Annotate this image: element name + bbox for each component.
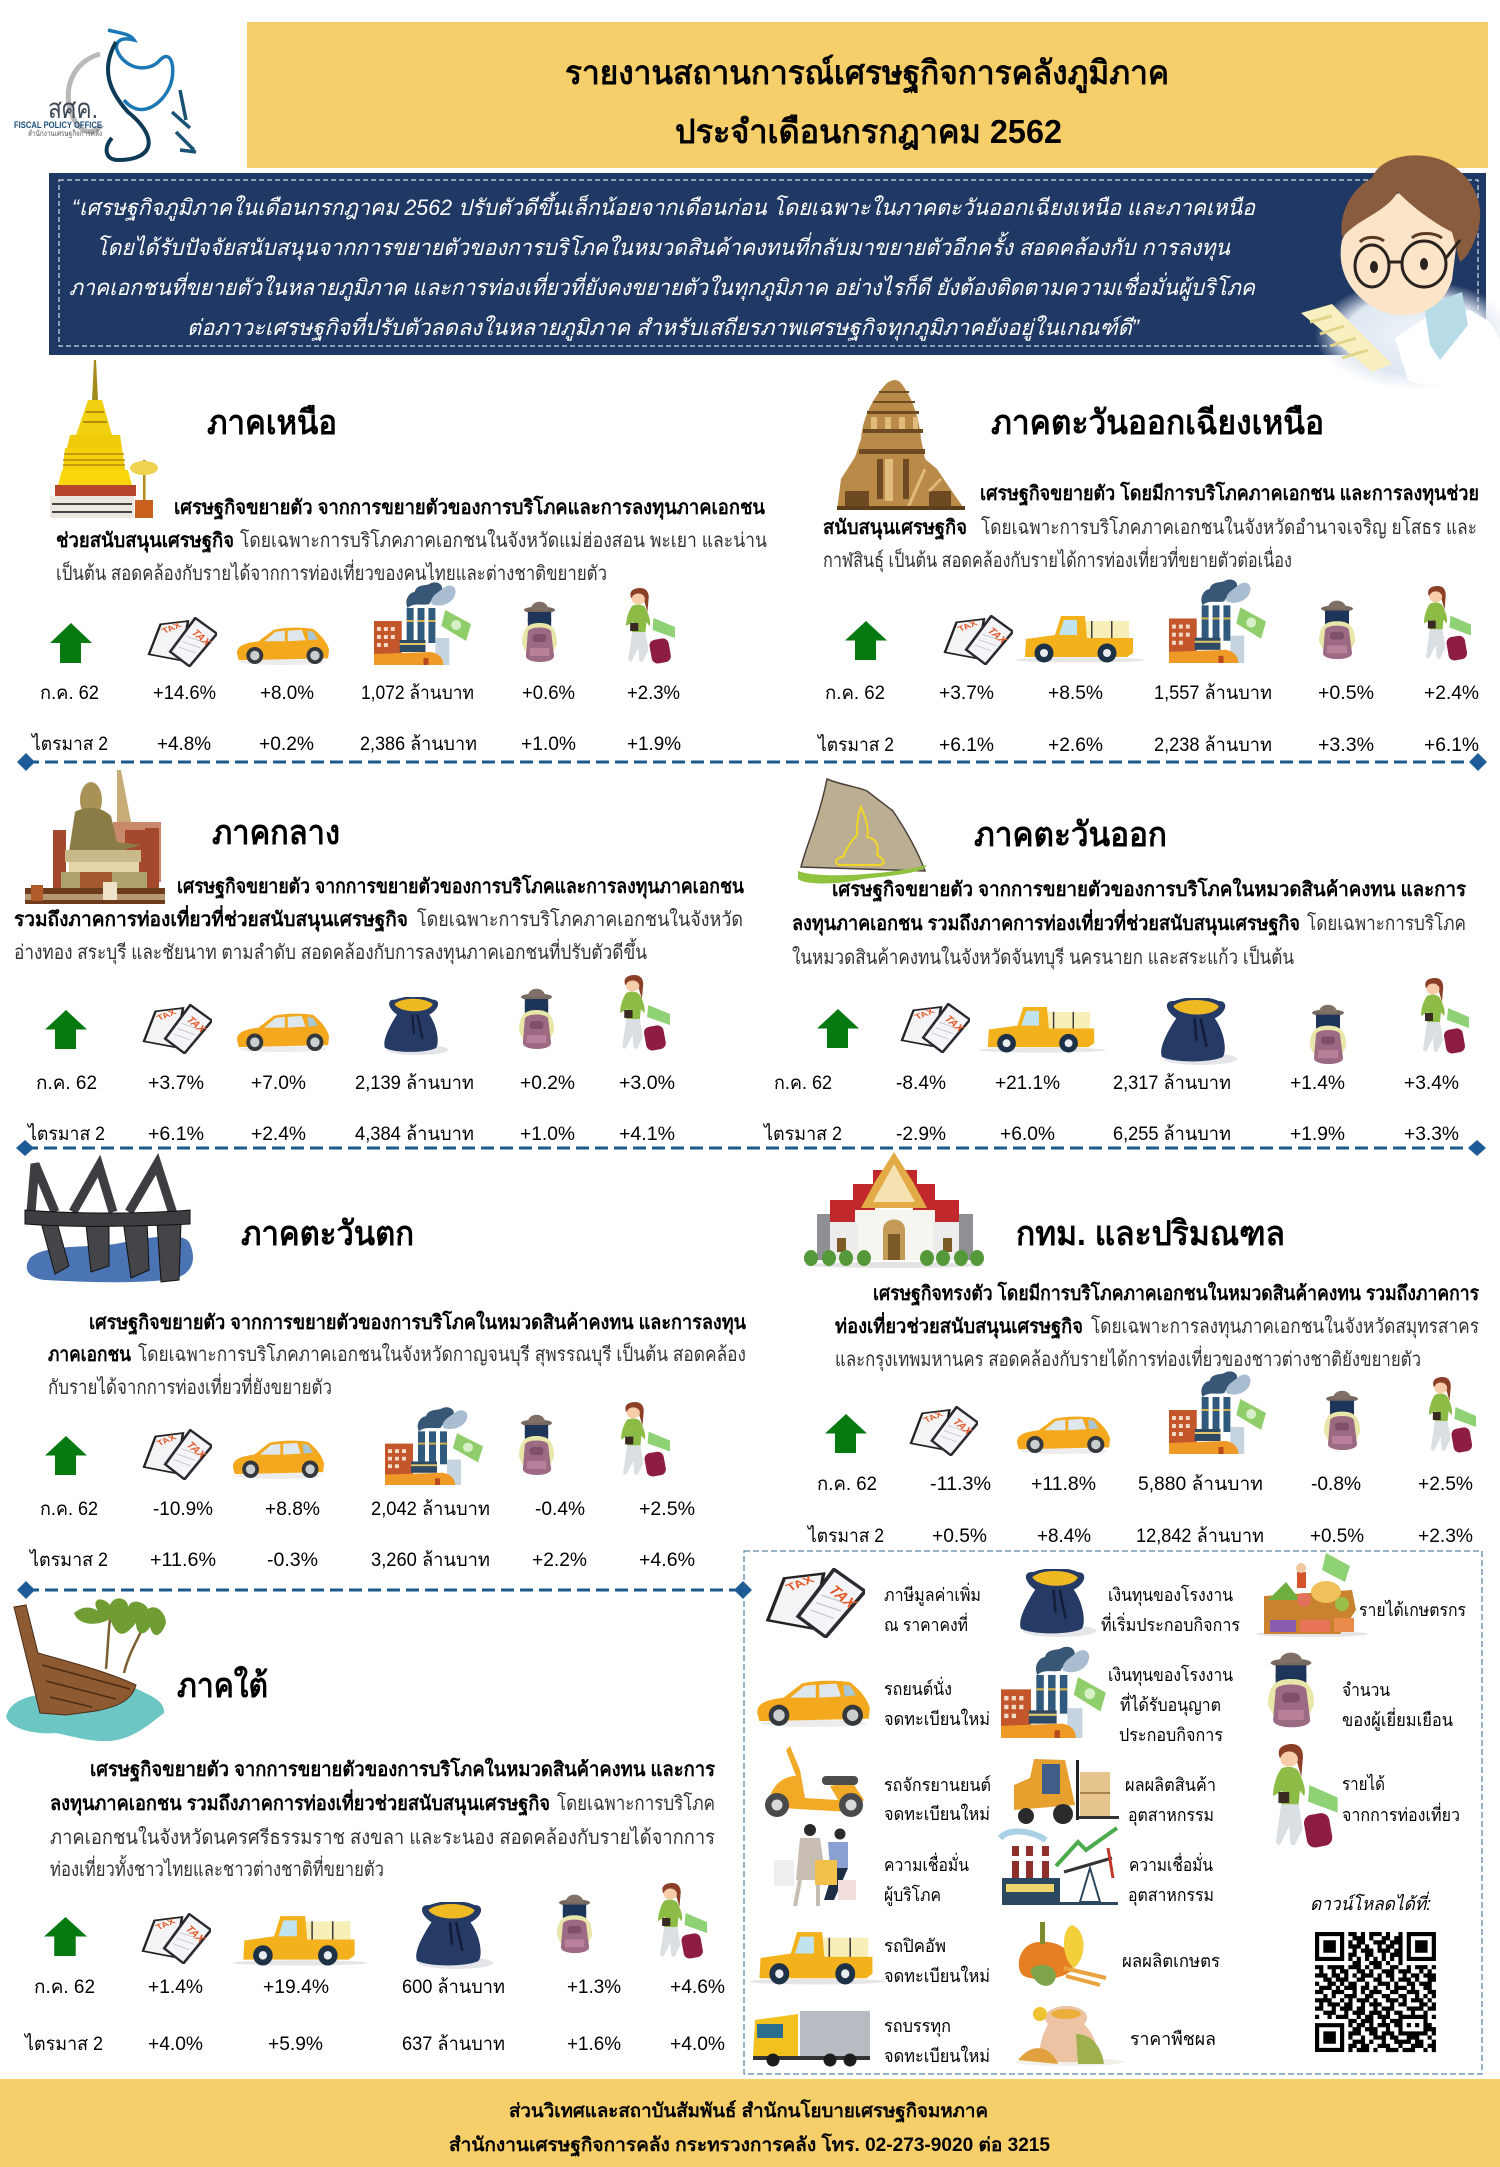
icon row (45, 1402, 670, 1485)
icon: Phimai prasat (837, 380, 965, 510)
paragraph (50, 1757, 715, 1881)
legend: industrial confidence: อุตสาหกรรม (1128, 1885, 1214, 1906)
values: ไตรมาส 2: +2.4% (251, 1124, 306, 1145)
values: ก.ค. 62 (40, 683, 680, 704)
legend: industrial confidence: ความเชื่อมั่น (1129, 1852, 1213, 1875)
values: ไตรมาส 2: +1.0% (520, 1124, 575, 1145)
values: ก.ค. 62: 2,317 ล้านบาท (1113, 1073, 1231, 1094)
values: ไตรมาส 2: +4.0% (670, 2034, 725, 2055)
paragraph (835, 1281, 1479, 1372)
legend: consumer confidence: ความเชื่อมั่น (884, 1852, 969, 1875)
paragraph: โดยเฉพาะการบริโภค (1307, 912, 1466, 935)
summary text: ต่อภาวะเศรษฐกิจที่ปรับตัวลดลงในหลายภูมิภาค สำหรับเสถียรภาพเศรษฐกิจทุกภูมิภาคยังอยู่ในเกณฑ์ดี” (187, 312, 1141, 341)
values: ก.ค. 62: +2.5% (639, 1499, 695, 1520)
values: ไตรมาส 2: +3.3% (1404, 1124, 1459, 1145)
paragraph: เป็นต้น สอดคล้องกับรายได้จากการท่องเที่ยวของคนไทยและต่างชาติขยายตัว (56, 559, 607, 585)
values: ไตรมาส 2: +1.0% (521, 734, 576, 755)
legend: visitors: จำนวน (1342, 1680, 1390, 1700)
legend: new passenger cars: รถยนต์นั่ง (884, 1676, 952, 1699)
paragraph: โดยเฉพาะการบริโภคภาคเอกชนในจังหวัดแม่ฮ่องสอน พะเยา และน่าน (240, 529, 767, 552)
summary text: “เศรษฐกิจภูมิภาคในเดือนกรกฎาคม 2562 ปรับตัวดีขึ้นเล็กน้อยจากเดือนก่อน โดยเฉพาะในภาคตะวันออกเฉียงเหนือ และภาคเหนือ (72, 191, 1256, 221)
values: ไตรมาส 2: +4.6% (639, 1550, 695, 1571)
header banner (247, 22, 1488, 168)
summary text: ภาคเอกชนที่ขยายตัวในหลายภูมิภาค และการท่องเที่ยวที่ยังคงขยายตัวในทุกภูมิภาค อย่างไรก็ดี ยังต้องติดตามความเชื่อมั่นผู้บริโภค (69, 272, 1256, 301)
values: ไตรมาส 2: 4,384 ล้านบาท (355, 1124, 474, 1145)
values: ไตรมาส 2: ไตรมาส 2 (816, 734, 894, 756)
icon: Buddha rock cliff (798, 779, 927, 884)
values: ก.ค. 62: -0.4% (535, 1499, 585, 1520)
footer line 2: สำนักงานเศรษฐกิจการคลัง กระทรวงการคลัง โทร. 02-273-9020 ต่อ 3215 (449, 2133, 1050, 2158)
values: ก.ค. 62: 2,139 ล้านบาท (355, 1073, 474, 1094)
heading: ภาคตะวันตก (241, 1215, 414, 1253)
icon: golden chedi (50, 360, 158, 518)
paragraph: ภาคเอกชน (48, 1344, 131, 1366)
legend: new trucks: รถบรรทุก (884, 2016, 951, 2037)
legend: capital of licensed factories: เงินทุนของโรงงาน (1108, 1664, 1233, 1686)
values: ไตรมาส 2 (816, 734, 1479, 756)
values: ก.ค. 62: +7.0% (251, 1073, 306, 1094)
values: ไตรมาส 2 (762, 1123, 1459, 1145)
values: ก.ค. 62: 1,557 ล้านบาท (1154, 683, 1272, 704)
legend: new motorcycles: รถจักรยานยนต์ (884, 1775, 991, 1795)
values: ไตรมาส 2: +1.6% (567, 2034, 621, 2055)
values: ก.ค. 62: +0.2% (520, 1073, 575, 1094)
legend: capital of licensed factories: ประกอบกิจการ (1119, 1725, 1223, 1745)
values: ก.ค. 62 (40, 1499, 695, 1520)
values: ก.ค. 62: ก.ค. 62 (36, 1073, 97, 1094)
logo: fiscal policy office: สศค. (48, 93, 98, 124)
values: ก.ค. 62: ก.ค. 62 (40, 1499, 98, 1520)
values: ไตรมาส 2: ไตรมาส 2 (762, 1123, 842, 1145)
legend: tourism income: รายได้ (1342, 1773, 1385, 1794)
values: ก.ค. 62: ก.ค. 62 (817, 1474, 877, 1495)
values: ไตรมาส 2: +3.3% (1318, 735, 1374, 756)
panel: ภาคตะวันออกเฉียงเหนือ (816, 380, 1479, 756)
download label: ดาวน์โหลดได้ที่: (1310, 1891, 1431, 1914)
heading: ภาคเหนือ (207, 404, 337, 442)
paragraph (14, 874, 744, 965)
values: ก.ค. 62: +0.6% (522, 683, 575, 704)
paragraph (56, 495, 767, 585)
paragraph: เศรษฐกิจขยายตัว จากการขยายตัวของการบริโภคในหมวดสินค้าคงทน และการ (832, 877, 1466, 903)
icon row (45, 975, 670, 1055)
values: ก.ค. 62: +8.5% (1048, 683, 1103, 704)
panel: ภาคกลาง (14, 770, 744, 1145)
values: ไตรมาส 2: +8.4% (1037, 1526, 1091, 1547)
icon row (825, 1371, 1476, 1455)
legend: new motorcycles: จดทะเบียนใหม่ (884, 1803, 990, 1824)
values: ก.ค. 62: +21.1% (995, 1073, 1060, 1094)
paragraph: ท่องเที่ยวช่วยสนับสนุนเศรษฐกิจ (835, 1311, 1083, 1340)
panel: ภาคตะวันออก (762, 779, 1469, 1145)
paragraph (823, 481, 1479, 573)
values: ไตรมาส 2: +4.0% (148, 2034, 203, 2055)
values: ก.ค. 62: +1.4% (1290, 1073, 1345, 1094)
title line 2: ประจำเดือนกรกฎาคม 2562 (675, 113, 1062, 150)
values: ก.ค. 62 (817, 1474, 1473, 1495)
summary text (69, 191, 1256, 341)
values: ไตรมาส 2: +11.6% (150, 1550, 216, 1571)
values: ก.ค. 62: 600 ล้านบาท (402, 1977, 505, 1998)
values: ไตรมาส 2: ไตรมาส 2 (26, 1123, 105, 1145)
legend: new pickups (749, 1932, 990, 1986)
logo: fiscal policy office (14, 30, 196, 160)
legend: capital of licensed factories: ที่ได้รับอนุญาต (1120, 1692, 1221, 1716)
legend: visitors (1268, 1653, 1453, 1731)
values: ก.ค. 62: +8.0% (260, 683, 314, 704)
paragraph: ลงทุนภาคเอกชน รวมถึงภาคการท่องเที่ยวที่ช่วยสนับสนุนเศรษฐกิจ (792, 908, 1300, 937)
logo: fiscal policy office: สำนักงานเศรษฐกิจการคลัง (28, 129, 102, 138)
footer line 1: ส่วนวิเทศและสถาบันสัมพันธ์ สำนักนโยบายเศรษฐกิจมหภาค (509, 2099, 988, 2124)
panel: legend (744, 1551, 1482, 2074)
legend: farm income: รายได้เกษตรกร (1359, 1599, 1466, 1620)
values: ไตรมาส 2: -2.9% (896, 1124, 946, 1145)
values: ก.ค. 62 (774, 1073, 1459, 1094)
heading: ภาคใต้ (177, 1665, 268, 1705)
paragraph (48, 1310, 746, 1399)
values: ก.ค. 62: ก.ค. 62 (40, 683, 99, 704)
heading: ภาคตะวันออก (974, 816, 1167, 854)
legend: VAT: ณ ราคาคงที่ (884, 1612, 968, 1635)
illustration: economist reading report (1301, 155, 1500, 390)
paragraph: เศรษฐกิจขยายตัว จากการขยายตัวของการบริโภคในหมวดสินค้าคงทน และการลงทุน (89, 1310, 746, 1336)
legend: manufacturing production: ผลผลิตสินค้า (1125, 1775, 1216, 1795)
panel: ภาคตะวันตก (25, 1164, 746, 1571)
paragraph: โดยเฉพาะการบริโภคภาคเอกชนในจังหวัดกาญจนบุรี สุพรรณบุรี เป็นต้น สอดคล้อง (138, 1341, 746, 1367)
values: ก.ค. 62 (825, 683, 1479, 704)
legend: new passenger cars (757, 1676, 990, 1729)
values: ก.ค. 62: -10.9% (153, 1499, 213, 1520)
panel: กทม. และปริมณฑล (804, 1152, 1479, 1547)
icon: Buddha at Sukhothai (25, 770, 165, 904)
values: ไตรมาส 2: ไตรมาส 2 (30, 733, 108, 755)
values: ก.ค. 62: +3.7% (148, 1073, 204, 1094)
legend: new trucks: จดทะเบียนใหม่ (884, 2045, 990, 2066)
legend: new pickups: รถปิคอัพ (884, 1936, 946, 1956)
legend: industrial confidence (1000, 1828, 1214, 1906)
legend: VAT (768, 1569, 981, 1637)
values: ก.ค. 62: +0.5% (1318, 683, 1374, 704)
legend: agricultural production (1019, 1922, 1220, 1986)
values: ก.ค. 62: -8.4% (896, 1073, 946, 1094)
values: ก.ค. 62: +8.8% (265, 1499, 320, 1520)
paragraph: รวมถึงภาคการท่องเที่ยวที่ช่วยสนับสนุนเศรษฐกิจ (14, 904, 408, 933)
paragraph: ท่องเที่ยวทั้งชาวไทยและชาวต่างชาติที่ขยายตัว (50, 1855, 384, 1881)
values: ไตรมาส 2: +6.1% (939, 735, 994, 756)
values: ไตรมาส 2: +6.1% (1424, 735, 1479, 756)
heading: กทม. และปริมณฑล (1016, 1215, 1285, 1253)
legend: farm income (1256, 1553, 1466, 1637)
values: ก.ค. 62: -0.8% (1311, 1474, 1361, 1495)
values: ก.ค. 62: +3.4% (1404, 1073, 1459, 1094)
values: ก.ค. 62: +3.7% (939, 683, 994, 704)
values: ก.ค. 62: +1.3% (567, 1977, 621, 1998)
paragraph: โดยเฉพาะการบริโภคภาคเอกชนในจังหวัด (417, 908, 743, 931)
values: ก.ค. 62: +11.8% (1031, 1474, 1096, 1495)
values: ก.ค. 62: +19.4% (263, 1977, 329, 1998)
paragraph: ช่วยสนับสนุนเศรษฐกิจ (56, 530, 234, 554)
values: ไตรมาส 2 (28, 1549, 695, 1571)
values: ก.ค. 62: +3.0% (619, 1073, 675, 1094)
values: ไตรมาส 2: +4.1% (619, 1124, 675, 1145)
values: ก.ค. 62: -11.3% (930, 1474, 991, 1495)
values: ก.ค. 62: +2.4% (1424, 683, 1479, 704)
legend: VAT: ภาษีมูลค่าเพิ่ม (884, 1582, 981, 1606)
values: ไตรมาส 2 (806, 1525, 1473, 1547)
legend: crop prices: ราคาพืชผล (1130, 2029, 1216, 2049)
values: ก.ค. 62: 1,072 ล้านบาท (361, 683, 474, 704)
QR code (1315, 1932, 1436, 2052)
heading: ภาคตะวันออกเฉียงเหนือ (991, 404, 1324, 442)
paragraph: เศรษฐกิจขยายตัว จากการขยายตัวของการบริโภคและการลงทุนภาคเอกชน (174, 495, 765, 521)
paragraph: ในหมวดสินค้าคงทนในจังหวัดจันทบุรี นครนายก และสระแก้ว เป็นต้น (792, 944, 1294, 970)
footer banner (0, 2079, 1500, 2167)
values: ไตรมาส 2: +5.9% (268, 2034, 323, 2055)
paragraph: กาฬสินธุ์ เป็นต้น สอดคล้องกับรายได้การท่องเที่ยวที่ขยายตัวต่อเนื่อง (823, 546, 1292, 573)
legend: capital of new factories: เงินทุนของโรงงาน (1108, 1584, 1233, 1606)
paragraph: เศรษฐกิจขยายตัว จากการขยายตัวของการบริโภคในหมวดสินค้าคงทน และการ (90, 1757, 715, 1783)
paragraph: เศรษฐกิจขยายตัว จากการขยายตัวของการบริโภคและการลงทุนภาคเอกชน (177, 874, 744, 900)
icon: long-tail boat and palms (6, 1598, 166, 1741)
legend: new pickups: จดทะเบียนใหม่ (884, 1965, 990, 1986)
icon row (44, 1883, 707, 1969)
paragraph: ลงทุนภาคเอกชน รวมถึงภาคการท่องเที่ยวช่วยสนับสนุนเศรษฐกิจ (50, 1788, 550, 1817)
values: ไตรมาส 2 (23, 2033, 725, 2055)
legend: new passenger cars: จดทะเบียนใหม่ (884, 1708, 990, 1729)
legend: capital of new factories (1020, 1568, 1240, 1637)
legend: manufacturing production: อุตสาหกรรม (1128, 1805, 1214, 1826)
paragraph (792, 877, 1466, 970)
values: ไตรมาส 2: +2.3% (1418, 1526, 1473, 1547)
values: ไตรมาส 2: +0.5% (1310, 1526, 1364, 1547)
values: ไตรมาส 2: 12,842 ล้านบาท (1136, 1526, 1264, 1547)
legend: crop prices (1016, 2006, 1216, 2066)
icon row (845, 579, 1471, 664)
legend: agricultural production: ผลผลิตเกษตร (1122, 1951, 1220, 1971)
legend: tourism income: จากการท่องเที่ยว (1342, 1802, 1460, 1825)
icon row (817, 978, 1469, 1065)
title line 1: รายงานสถานการณ์เศรษฐกิจการคลังภูมิภาค (565, 54, 1169, 94)
summary text: โดยได้รับปัจจัยสนับสนุนจากการขยายตัวของการบริโภคในหมวดสินค้าคงทนที่กลับมาขยายตัวอีกครั้ง สอดคล้องกับ การลงทุน (96, 231, 1231, 261)
values: ไตรมาส 2: +2.2% (532, 1550, 587, 1571)
legend: visitors: ของผู้เยี่ยมเยือน (1342, 1707, 1453, 1731)
values: ก.ค. 62: +4.6% (670, 1977, 725, 1998)
values: ก.ค. 62: 5,880 ล้านบาท (1138, 1474, 1263, 1495)
legend: new motorcycles (765, 1746, 991, 1824)
icon: River Kwai bridge (25, 1164, 193, 1282)
summary panel (49, 173, 1486, 355)
values: ก.ค. 62: ก.ค. 62 (774, 1073, 832, 1094)
legend: capital of licensed factories (1001, 1647, 1233, 1745)
values: ก.ค. 62: ก.ค. 62 (34, 1977, 95, 1998)
values: ก.ค. 62: ก.ค. 62 (825, 683, 885, 704)
values: ก.ค. 62 (34, 1977, 725, 1998)
legend: tourism income (1273, 1744, 1460, 1849)
values: ก.ค. 62 (36, 1073, 675, 1094)
values: ไตรมาส 2: +4.8% (157, 734, 211, 755)
values: ไตรมาส 2: +6.0% (1000, 1124, 1055, 1145)
values: ไตรมาส 2: ไตรมาส 2 (28, 1549, 108, 1571)
values: ก.ค. 62: 2,042 ล้านบาท (371, 1499, 490, 1520)
icon: Marble Temple (804, 1152, 984, 1268)
values: ไตรมาส 2: -0.3% (267, 1550, 318, 1571)
values: ไตรมาส 2: 3,260 ล้านบาท (371, 1550, 490, 1571)
logo: fiscal policy office: FISCAL POLICY OFFICE (14, 120, 102, 130)
values: ไตรมาส 2: 2,386 ล้านบาท (360, 734, 477, 755)
values: ก.ค. 62: +1.4% (148, 1977, 203, 1998)
paragraph: อ่างทอง สระบุรี และชัยนาท ตามลำดับ สอดคล้องกับการลงทุนภาคเอกชนที่ปรับตัวดีขึ้น (14, 938, 647, 965)
values: ก.ค. 62: +2.3% (627, 683, 680, 704)
values: ไตรมาส 2: +0.2% (259, 734, 314, 755)
legend: capital of new factories: ที่เริ่มประกอบกิจการ (1101, 1612, 1240, 1635)
legend: new trucks (753, 2011, 990, 2066)
values: ก.ค. 62: +14.6% (153, 683, 216, 704)
values: ไตรมาส 2: 6,255 ล้านบาท (1113, 1124, 1231, 1145)
values: ไตรมาส 2 (26, 1123, 675, 1145)
legend: consumer confidence: ผู้บริโภค (884, 1884, 941, 1906)
values: ไตรมาส 2: +1.9% (1290, 1124, 1345, 1145)
legend: consumer confidence (774, 1824, 969, 1906)
values: ไตรมาส 2: ไตรมาส 2 (23, 2033, 103, 2055)
paragraph: โดยเฉพาะการบริโภค (557, 1792, 715, 1815)
values: ไตรมาส 2: +6.1% (148, 1124, 204, 1145)
paragraph: ภาคเอกชนในจังหวัดนครศรีธรรมราช สงขลา และระนอง สอดคล้องกับรายได้จากการ (50, 1826, 715, 1849)
values: ไตรมาส 2: ไตรมาส 2 (806, 1525, 884, 1547)
values: ไตรมาส 2: 637 ล้านบาท (402, 2034, 505, 2055)
panel: ภาคเหนือ (30, 360, 767, 755)
values: ก.ค. 62: +2.5% (1418, 1474, 1473, 1495)
values: ไตรมาส 2: 2,238 ล้านบาท (1154, 735, 1272, 756)
values: ไตรมาส 2 (30, 733, 681, 755)
icon row (50, 582, 675, 666)
paragraph: กับรายได้จากการท่องเที่ยวที่ยังขยายตัว (48, 1373, 332, 1399)
legend: manufacturing production (1014, 1759, 1216, 1826)
heading: ภาคกลาง (212, 814, 340, 852)
values: ไตรมาส 2: +0.5% (932, 1526, 987, 1547)
values: ไตรมาส 2: +2.6% (1048, 735, 1103, 756)
values: ไตรมาส 2: +1.9% (627, 734, 681, 755)
panel: ภาคใต้ (6, 1598, 725, 2055)
paragraph: สนับสนุนเศรษฐกิจ (823, 517, 967, 541)
